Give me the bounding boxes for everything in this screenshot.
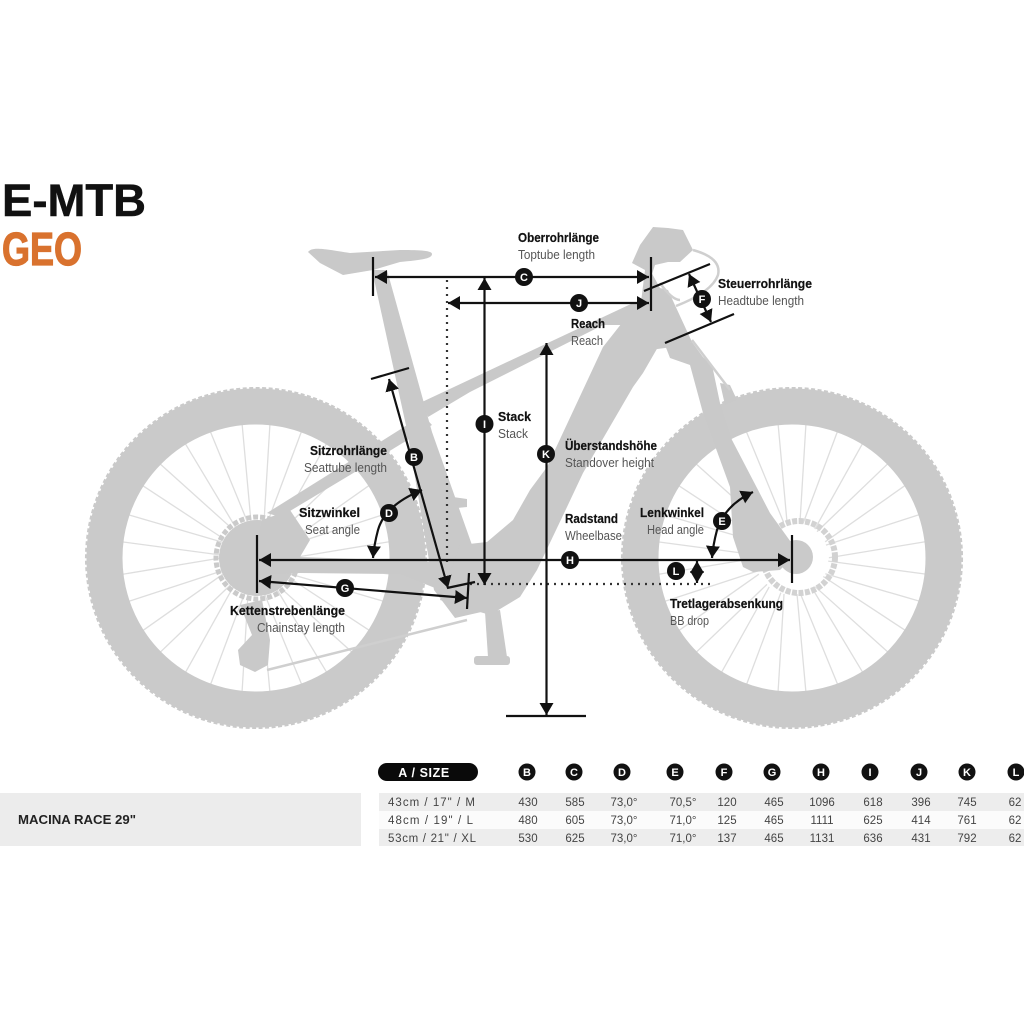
dimension L: BB drop: L xyxy=(673,566,680,578)
label: Tretlagerabsenkung: BB drop xyxy=(670,613,709,628)
table row: XL: 465 xyxy=(764,833,784,845)
table row: XL: 431 xyxy=(911,833,931,845)
label: Radstand xyxy=(565,511,622,543)
table row: L: 48cm / 19" / L xyxy=(388,815,474,827)
table row: M: 120 xyxy=(717,797,737,809)
label: Reach xyxy=(571,316,605,348)
table row: L: 125 xyxy=(717,815,737,827)
table row: XL: 53cm / 21" / XL xyxy=(388,833,477,845)
cables and chain xyxy=(267,250,730,670)
table header: column letters: G xyxy=(768,767,776,779)
label: Lenkwinkel xyxy=(640,505,704,537)
label: Reach: Reach xyxy=(571,333,603,348)
rear wheel xyxy=(86,388,426,728)
label: Lenkwinkel: Lenkwinkel xyxy=(640,505,704,520)
label: Kettenstrebenlänge: Chainstay length xyxy=(257,620,345,635)
dimension E: head angle: E xyxy=(718,516,726,528)
label: Stack xyxy=(498,409,532,441)
table row: M: 396 xyxy=(911,797,931,809)
label: Oberrohrlänge xyxy=(518,230,599,262)
table row: M: 465 xyxy=(764,797,784,809)
dimension C: toptube length xyxy=(373,257,651,311)
table header: column letters: E xyxy=(671,767,679,779)
label: Radstand: Radstand xyxy=(565,511,618,526)
dimension J: reach xyxy=(448,294,649,312)
dimension C: toptube length: C xyxy=(520,272,528,284)
dimension J: reach: J xyxy=(576,298,582,310)
label: Oberrohrlänge: Oberrohrlänge xyxy=(518,230,599,245)
label: Sitzwinkel: Seat angle xyxy=(305,522,360,537)
table header: column letters: K xyxy=(963,767,971,779)
label: Reach: Reach xyxy=(571,316,605,331)
dimension L: BB drop xyxy=(667,561,697,583)
table row: M: 618 xyxy=(863,797,883,809)
label: Tretlagerabsenkung xyxy=(670,596,783,628)
table row: L: 761 xyxy=(957,815,977,827)
dimension F: headtube length xyxy=(644,264,734,343)
table row: L: 625 xyxy=(863,815,883,827)
table header: column letters: L xyxy=(1013,767,1020,779)
dimension D: seat angle xyxy=(373,490,422,558)
label: Kettenstrebenlänge xyxy=(230,603,345,635)
dimension K: standover height: K xyxy=(542,449,550,461)
label: Sitzrohrlänge xyxy=(304,443,387,475)
table row: M: 62 xyxy=(1009,797,1021,809)
table header: column letters: H xyxy=(817,767,825,779)
table header: column letters: F xyxy=(721,767,728,779)
table row: XL: 73,0° xyxy=(611,833,637,845)
table row: L: 62 xyxy=(1009,815,1021,827)
table row: L: 414 xyxy=(911,815,931,827)
table row: XL: 530 xyxy=(518,833,538,845)
table row: L: 465 xyxy=(764,815,784,827)
dimension B: seattube length xyxy=(371,368,475,588)
table row: L xyxy=(388,815,1021,827)
label: Sitzwinkel xyxy=(299,505,360,537)
frame, fork, saddle and drivetrain xyxy=(238,227,793,672)
label: Sitzrohrlänge: Sitzrohrlänge xyxy=(310,443,387,458)
table header: size pill: A / SIZE xyxy=(398,766,450,780)
label: Radstand: Wheelbase xyxy=(565,528,622,543)
dimension K: standover height xyxy=(506,343,586,716)
table row: XL: 71,0° xyxy=(670,833,696,845)
dimension I: stack: I xyxy=(483,419,486,431)
label: Sitzrohrlänge: Seattube length xyxy=(304,460,387,475)
table header: size pill xyxy=(378,763,478,781)
table row: M xyxy=(388,797,1021,809)
table row: XL: 137 xyxy=(717,833,737,845)
dimension H: wheelbase: H xyxy=(566,555,574,567)
dimension D: seat angle: D xyxy=(385,508,393,520)
table row: L: 71,0° xyxy=(670,815,696,827)
table row: M: 585 xyxy=(565,797,585,809)
dimension G: chainstay length xyxy=(259,573,469,609)
table row: L: 1111 xyxy=(810,815,834,827)
table row: L: 480 xyxy=(518,815,538,827)
table row: XL: 625 xyxy=(565,833,585,845)
table row: XL: 636 xyxy=(863,833,883,845)
table header: column letters: D xyxy=(618,767,626,779)
table row bands xyxy=(379,793,1024,846)
model name panel xyxy=(0,793,361,846)
label: Stack: Stack xyxy=(498,426,528,441)
dimension G: chainstay length: G xyxy=(341,583,349,595)
label: Steuerrohrlänge: Headtube length xyxy=(718,293,804,308)
label: Steuerrohrlänge xyxy=(718,276,812,308)
table row: XL: 1131 xyxy=(810,833,834,845)
dimension H: wheelbase xyxy=(257,535,792,593)
dimension I: stack xyxy=(476,278,494,585)
geometry table xyxy=(378,763,1024,846)
table row: M: 73,0° xyxy=(611,797,637,809)
table row: M: 745 xyxy=(957,797,977,809)
label: Überstandshöhe xyxy=(565,438,657,470)
title: E-MTB: E-MTB xyxy=(2,175,146,226)
front wheel xyxy=(622,388,962,728)
table row: XL: 792 xyxy=(957,833,977,845)
label: Sitzwinkel: Sitzwinkel xyxy=(299,505,360,520)
label: Oberrohrlänge: Toptube length xyxy=(518,247,595,262)
bike silhouette xyxy=(86,227,962,728)
label: Stack: Stack xyxy=(498,409,532,424)
title: GEO: GEO xyxy=(2,223,82,275)
dimension F: headtube length: F xyxy=(699,294,706,306)
table row: L: 73,0° xyxy=(611,815,637,827)
table row: M: 1096 xyxy=(809,797,835,809)
label: Lenkwinkel: Head angle xyxy=(647,522,704,537)
table row: XL xyxy=(388,833,1021,845)
table row: XL: 62 xyxy=(1009,833,1021,845)
table row: L: 605 xyxy=(565,815,585,827)
dotted reference lines xyxy=(447,280,714,584)
table header: column letters: I xyxy=(868,767,872,779)
table header: column letters: J xyxy=(916,767,922,779)
table header: column letters: B xyxy=(523,767,531,779)
label: Überstandshöhe: Standover height xyxy=(565,455,654,470)
table row: M: 43cm / 17" / M xyxy=(388,797,475,809)
label: Steuerrohrlänge: Steuerrohrlänge xyxy=(718,276,812,291)
label: Tretlagerabsenkung: Tretlagerabsenkung xyxy=(670,596,783,611)
model name panel: MACINA RACE 29" xyxy=(18,813,136,827)
table header: column letters: C xyxy=(570,767,578,779)
table header: column letters xyxy=(518,764,1024,780)
label: Kettenstrebenlänge: Kettenstrebenlänge xyxy=(230,603,345,618)
table row: M: 70,5° xyxy=(670,797,696,809)
table row: M: 430 xyxy=(518,797,538,809)
dimension E: head angle xyxy=(712,492,753,558)
label: Überstandshöhe: Überstandshöhe xyxy=(565,438,657,453)
dimension B: seattube length: B xyxy=(410,452,418,464)
